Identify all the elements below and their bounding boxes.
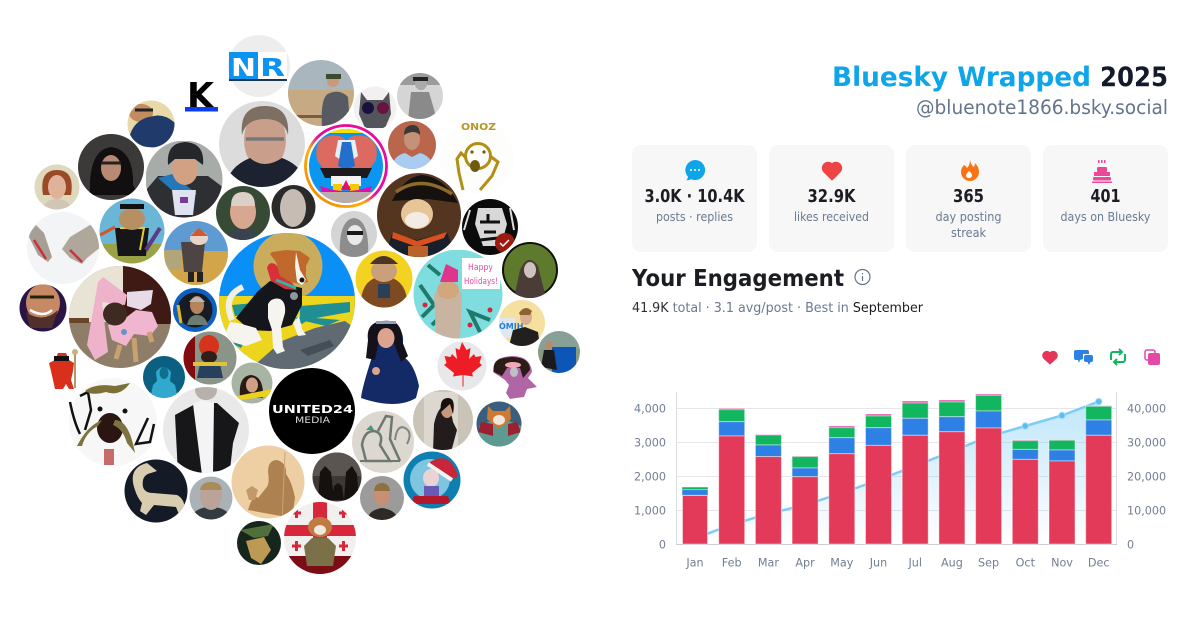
avatar: snow globe with Santa hat xyxy=(403,451,461,509)
avatar: woman with yellow banner xyxy=(231,362,273,404)
stat card: likes: 32.9K xyxy=(808,187,857,207)
avatar: man in helmet xyxy=(146,141,224,220)
month labels: Jun xyxy=(869,556,887,570)
left axis labels: 4,000 xyxy=(634,402,666,416)
icon: speech bubble xyxy=(685,160,705,180)
avatar: UNITED24 Media: MEDIA xyxy=(295,416,330,426)
stat card: likes xyxy=(769,145,894,252)
stat card: streak xyxy=(906,145,1031,252)
month labels: Jul xyxy=(907,556,922,570)
month labels: Oct xyxy=(1016,556,1036,570)
avatar: Happy Holidays dog xyxy=(413,250,503,340)
avatar: red haired woman xyxy=(34,164,80,210)
avatar: shadow of woman xyxy=(231,445,305,522)
avatar: NR logo: N xyxy=(231,53,256,82)
avatar: ONOZ drawing: ONOZ xyxy=(461,122,496,133)
icon: heart xyxy=(822,162,842,180)
left axis labels: 0 xyxy=(659,538,666,552)
month labels: May xyxy=(830,556,854,570)
avatar: pencil sketch animals xyxy=(352,411,414,473)
bar: Jun xyxy=(866,414,892,544)
avatar: doge in admiral hat xyxy=(377,173,461,260)
icon: cake xyxy=(1092,160,1112,183)
stat card: likes: likes received xyxy=(794,210,869,224)
avatar: man in black suit xyxy=(163,380,249,475)
avatar: woman in leather jacket mirror selfie xyxy=(413,390,473,452)
legend: quotes squares xyxy=(1145,350,1160,365)
handle: @bluenote1866.bsky.social xyxy=(916,96,1168,119)
avatar: wizard in forest xyxy=(502,242,558,298)
bar: Mar xyxy=(755,434,781,544)
avatar: UNITED24 Media xyxy=(269,368,355,454)
left axis labels: 3,000 xyxy=(634,436,666,450)
right axis labels: 0 xyxy=(1127,538,1134,552)
stat card: posts and replies: 3.0K · 10.4K xyxy=(644,187,746,207)
avatar: pug in pink costume xyxy=(69,266,171,368)
month labels: Aug xyxy=(941,556,963,570)
bar: Oct xyxy=(1012,440,1038,544)
avatar: bearded man comic xyxy=(237,521,281,565)
avatar: dark silhouettes xyxy=(312,452,362,502)
stat card: streak: streak xyxy=(951,226,986,240)
avatar: steal your face skull xyxy=(304,124,388,208)
left axis labels: 2,000 xyxy=(634,470,666,484)
avatar: blond man portrait xyxy=(189,476,233,521)
avatar: black and white boy portrait xyxy=(271,185,316,230)
avatar: Happy Holidays dog: Happy xyxy=(468,263,493,273)
heading: Your Engagement: Your Engagement xyxy=(631,266,844,292)
icon: info xyxy=(855,270,870,284)
stat card: days on Bluesky: 401 xyxy=(1090,187,1120,207)
right axis labels: 40,000 xyxy=(1127,402,1166,416)
title: Bluesky Wrapped xyxy=(832,62,1091,93)
avatar: NR logo: R xyxy=(260,53,285,82)
stacked bar chart with cumulative line xyxy=(634,392,1166,570)
avatar: woman with blue and yellow banner xyxy=(499,300,545,346)
bar: Feb xyxy=(719,408,745,544)
stat card: streak: day posting xyxy=(936,210,1002,224)
avatar: man on grey background xyxy=(360,476,404,521)
avatar: man at blue sign xyxy=(538,331,580,373)
grid lines xyxy=(676,408,1117,510)
avatar: blue hooded figure xyxy=(143,356,185,399)
icon: flame xyxy=(961,160,979,181)
title: 2025 xyxy=(1100,62,1168,93)
left axis labels: 1,000 xyxy=(634,504,666,518)
avatar: bearded man engraving xyxy=(462,199,518,255)
avatar: hedgehog in graduation gown xyxy=(99,198,165,266)
avatar: Canadian maple leaf xyxy=(438,342,486,390)
month labels: Apr xyxy=(795,556,815,570)
month labels: Dec xyxy=(1088,556,1110,570)
avatar: moustache ghost xyxy=(69,378,157,466)
bar: Jan xyxy=(682,487,708,544)
avatar: reindeer in snow xyxy=(27,212,102,284)
stat card: posts and replies xyxy=(632,145,757,252)
bar: Aug xyxy=(939,400,965,544)
avatar: cat with round glasses xyxy=(353,86,397,130)
month labels: Nov xyxy=(1051,556,1073,570)
right axis labels: 10,000 xyxy=(1127,504,1166,518)
stat card: streak: 365 xyxy=(953,187,984,207)
month labels: Jan xyxy=(685,556,704,570)
avatar: NR logo xyxy=(228,35,290,97)
avatar cluster xyxy=(19,35,580,574)
bars xyxy=(682,394,1112,544)
legend: replies bubbles xyxy=(1074,350,1093,365)
avatar: woman in blue and gold wreath xyxy=(173,288,217,332)
avatar: woman dark background xyxy=(78,134,144,200)
avatar: woman in sunglasses sketch xyxy=(331,211,377,258)
avatar: bald man with glasses xyxy=(216,186,270,241)
legend: likes heart xyxy=(1043,351,1057,364)
bar: Apr xyxy=(792,456,818,544)
right axis labels: 30,000 xyxy=(1127,436,1166,450)
month labels: Sep xyxy=(978,556,999,570)
cumulative area xyxy=(695,402,1099,544)
avatar: UNITED24 Media: UNITED24 xyxy=(272,404,353,416)
bar: Dec xyxy=(1086,406,1112,544)
avatar: fox wizard in wheat field xyxy=(164,221,228,285)
month labels: Feb xyxy=(722,556,742,570)
engagement summary: 41.9K total · 3.1 avg/post · Best in September xyxy=(632,300,923,316)
avatar: Patron dog with halo xyxy=(219,232,357,370)
bar: Sep xyxy=(976,394,1002,544)
month labels: Mar xyxy=(758,556,779,570)
avatar: soldier black and white xyxy=(397,73,443,120)
avatar: large portrait man xyxy=(219,100,308,190)
avatar: pink dress creature xyxy=(493,356,537,399)
right axis labels: 20,000 xyxy=(1127,470,1166,484)
cumulative points xyxy=(1022,398,1102,429)
avatar: beefeater xyxy=(49,349,78,389)
avatar: red helmet monkey figure xyxy=(183,331,237,385)
bar: Nov xyxy=(1049,440,1075,544)
legend icons xyxy=(1043,349,1160,365)
avatar: red panda with Georgian flag xyxy=(284,502,356,574)
avatar: woman with blue and yellow banner: ÓMIH xyxy=(499,320,523,331)
stat card: posts and replies: posts · replies xyxy=(656,210,733,224)
bar: May xyxy=(829,426,855,544)
avatar: man in hat over landscape xyxy=(288,60,354,127)
avatar: man with glasses xyxy=(128,100,174,148)
month labels xyxy=(685,556,1110,570)
stat card: days on Bluesky xyxy=(1043,145,1168,252)
cumulative line xyxy=(695,402,1099,538)
avatar: shiba warrior xyxy=(476,401,522,448)
stat card: days on Bluesky: days on Bluesky xyxy=(1060,210,1150,224)
avatar: bearded man with glasses xyxy=(19,284,67,332)
legend: reposts arrows xyxy=(1111,349,1125,365)
bar: Jul xyxy=(902,401,928,544)
avatar: woman in navy jacket xyxy=(361,321,419,404)
avatar: man at brick wall xyxy=(388,121,436,170)
left axis labels xyxy=(634,402,666,552)
avatar: ONOZ drawing xyxy=(440,120,514,194)
avatar: sculpted horse xyxy=(124,459,188,523)
avatar: Happy Holidays dog: Holidays! xyxy=(464,277,498,287)
avatar: K logo: K xyxy=(187,76,215,117)
right axis labels xyxy=(1127,402,1166,552)
avatar: doge in brown jacket xyxy=(355,250,413,308)
